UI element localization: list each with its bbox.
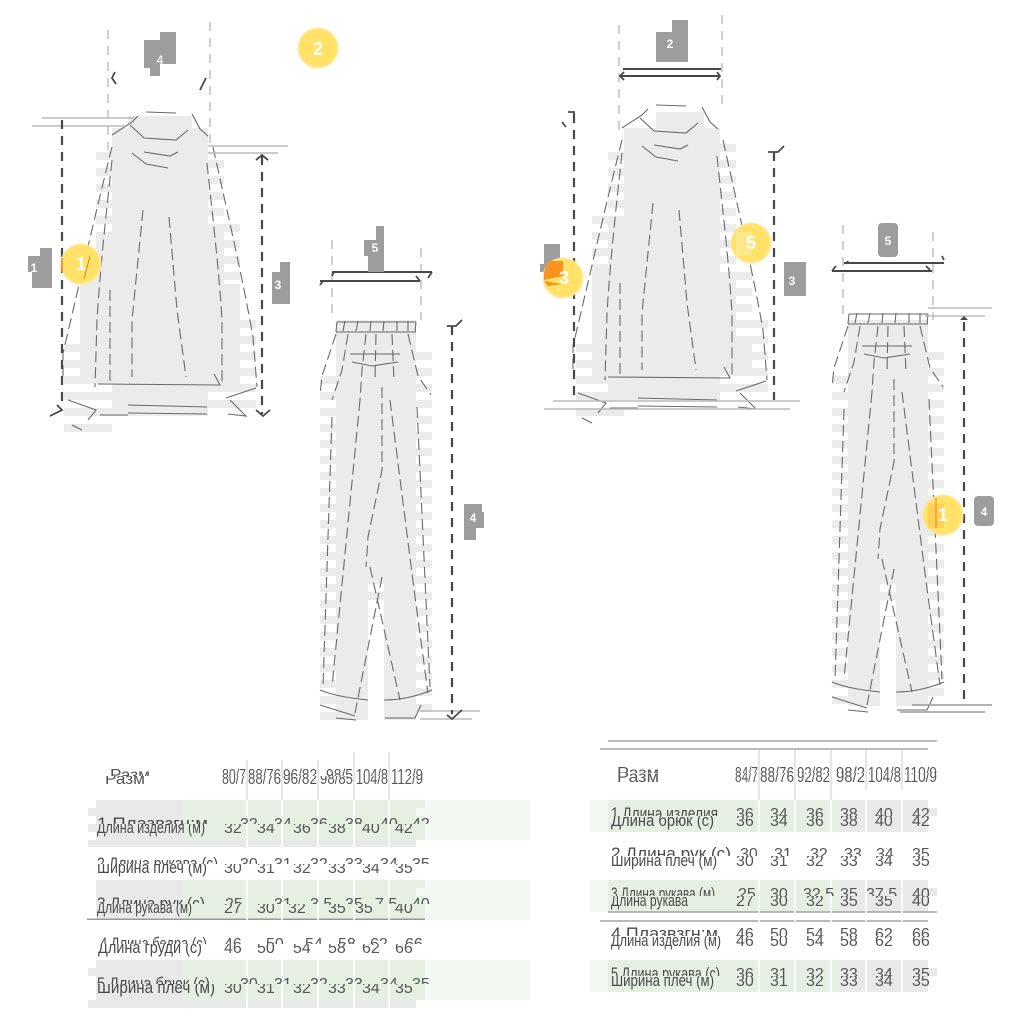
table text bottom slices: 98/85: [320, 771, 353, 788]
table text top slices: 33: [345, 856, 363, 873]
dimension arrow: length: [256, 155, 270, 416]
table text top slices: 1 Плазвзгн:м: [97, 814, 208, 833]
table text top slices: 31: [770, 966, 788, 983]
table text top slices: 30: [240, 856, 258, 873]
table text bottom slices: 110/9: [904, 769, 937, 786]
table bands: [590, 741, 937, 992]
table text bottom slices: 40: [912, 893, 930, 910]
table text top slices: 2 Длина рук (с): [611, 844, 731, 863]
table text top slices: 30: [770, 886, 788, 903]
table text top slices: 54: [806, 926, 824, 943]
table text top slices: 35: [912, 846, 930, 863]
table text bottom slices: 32: [806, 853, 824, 870]
table text bottom slices: 46: [736, 933, 754, 950]
table text top slices: 3 Длина рук (с): [97, 894, 205, 913]
table text bottom slices: 31: [770, 853, 788, 870]
table text top slices: 3,5: [310, 896, 332, 913]
table text top slices: 31: [274, 976, 292, 993]
table text top slices: 42: [412, 816, 430, 833]
table text bottom slices: 34: [770, 813, 788, 830]
table text top slices: 35: [412, 856, 430, 873]
table text top slices: 33: [840, 966, 858, 983]
table text bottom slices: Длина изделия (м): [97, 818, 205, 837]
table text bottom slices: 27: [736, 893, 754, 910]
table text top slices: 32: [240, 816, 258, 833]
table text top slices: 104/8: [356, 767, 388, 784]
table text bottom slices: 36: [806, 813, 824, 830]
table text top slices: Разм: [110, 767, 150, 784]
table text bottom slices: 32: [224, 820, 242, 837]
icon: grey badge 2: [656, 20, 688, 62]
table text top slices: 35: [345, 896, 363, 913]
table text bottom slices: 35: [355, 900, 373, 917]
icon: yellow badge 3 with orange overlap: [542, 257, 584, 299]
table bands: [87, 752, 530, 1008]
table text bottom slices: 30: [736, 853, 754, 870]
icon: yellow badge 3 with orange overlap: 3: [559, 268, 569, 288]
table text top slices: 1 Длина изделия: [611, 804, 718, 823]
table text top slices: 32: [310, 856, 328, 873]
panel: left trousers measure lines: [320, 240, 480, 719]
table text bottom slices: 32: [806, 973, 824, 990]
icon: grey badge 3: [784, 262, 806, 296]
table text bottom slices: 58: [840, 933, 858, 950]
icon: grey badge 5 right: 5: [885, 234, 892, 248]
table text top slices: 31: [774, 846, 792, 863]
icon: grey badge 5: 5: [372, 241, 379, 255]
table text top slices: 40: [912, 886, 930, 903]
table text top slices: 5 Длина брюк (с): [97, 974, 210, 993]
table text bottom slices: [97, 771, 423, 997]
dimension arrow: trousers length: [960, 316, 968, 703]
table text bottom slices: Длина груди (с): [98, 938, 202, 957]
table text top slices: [611, 765, 937, 983]
table text top slices: 4 Длина бедра (с): [100, 934, 207, 953]
table text top slices: 40: [380, 816, 398, 833]
table text bottom slices: 66: [395, 940, 413, 957]
table text top slices: 25: [225, 896, 243, 913]
table text top slices: 3 Длина рукава (м): [611, 884, 715, 903]
table text bottom slices: 62: [875, 933, 893, 950]
table text bottom slices: 32: [288, 900, 306, 917]
icon: yellow badge 5: [730, 222, 772, 264]
table text bottom slices: 40: [875, 813, 893, 830]
table text bottom slices: 104/8: [356, 771, 388, 788]
table text top slices: 54: [305, 936, 323, 953]
sweatshirt fill: [576, 112, 768, 416]
panel: left size table: [87, 752, 530, 1008]
icon: grey badge 1: [540, 244, 560, 272]
table text bottom slices: Ширина плеч (м): [611, 851, 717, 870]
table text top slices: 34: [876, 846, 894, 863]
table text bottom slices: Длина брюк (с): [611, 811, 714, 830]
table text top slices: 32,5: [803, 886, 834, 903]
table text bottom slices: 40: [362, 820, 380, 837]
panel: left trousers diagram: [320, 320, 432, 720]
table text top slices: 46: [736, 926, 754, 943]
table text top slices: 2 Длина рукава (с): [97, 854, 218, 873]
table text bottom slices: 30: [736, 973, 754, 990]
panel: left sweatshirt diagram: [63, 112, 257, 432]
table text bottom slices: 30: [770, 893, 788, 910]
table text top slices: 46: [224, 936, 242, 953]
table text bottom slices: 34: [875, 853, 893, 870]
icon: grey badge 3: 3: [275, 278, 282, 292]
icon: grey badge 4 trousers: 4: [470, 511, 477, 525]
table text top slices: 110/9: [904, 765, 937, 782]
icon: yellow badge 1 right: [922, 494, 964, 536]
table text bottom slices: Длина рукава: [611, 891, 688, 910]
table text bottom slices: Длина изделия (м): [611, 931, 721, 950]
table text bottom slices: 84/7: [735, 769, 758, 786]
table text bottom slices: 88/76: [760, 769, 794, 786]
panel: right size table: [590, 741, 937, 992]
table text bottom slices: 66: [912, 933, 930, 950]
trousers outlines: [320, 321, 432, 720]
table text bottom slices: 31: [257, 860, 275, 877]
icon: grey badge 4: [144, 32, 176, 76]
icon: yellow badge 1 right: 1: [938, 505, 948, 525]
icon: grey badge 4 right: 4: [981, 505, 988, 519]
table text top slices: 98/2: [836, 765, 865, 782]
table text bottom slices: 32: [293, 980, 311, 997]
table text bottom slices: 31: [770, 973, 788, 990]
table text bottom slices: 32: [806, 893, 824, 910]
table text bottom slices: 33: [840, 853, 858, 870]
table text top slices: 31: [274, 896, 292, 913]
table text bottom slices: Ширина плеч (м): [97, 978, 215, 997]
table text bottom slices: Ширина плеч (м): [97, 858, 207, 877]
table text bottom slices: 34: [362, 980, 380, 997]
table text bottom slices: 50: [257, 940, 275, 957]
icon: yellow badge 1: 1: [76, 254, 86, 274]
table text top slices: 31: [274, 856, 292, 873]
icon: yellow badge 2: [297, 27, 339, 69]
table text bottom slices: 54: [293, 940, 311, 957]
table text top slices: 66: [912, 926, 930, 943]
panel: right sweatshirt measure lines: [544, 15, 800, 409]
table text bottom slices: 33: [328, 980, 346, 997]
sweatshirt fill: [64, 116, 256, 432]
table text top slices: 36: [310, 816, 328, 833]
table text top slices: 88/76: [760, 765, 794, 782]
table text top slices: 50: [770, 926, 788, 943]
table text bottom slices: 32: [293, 860, 311, 877]
table text top slices: 96/82: [283, 767, 317, 784]
table text bottom slices: [611, 769, 937, 990]
sweatshirt outlines: [63, 112, 257, 430]
table text bottom slices: 112/9: [391, 771, 423, 788]
icon: yellow badge 5: 5: [746, 233, 756, 253]
icon: grey badge 4: 4: [157, 53, 164, 67]
table text top slices: 25: [738, 886, 756, 903]
table text top slices: 88/76: [248, 767, 281, 784]
icon: grey badge 2: 2: [667, 37, 674, 51]
panel: left sweatshirt measure lines: [32, 22, 288, 416]
icon: grey badge 5: [364, 226, 384, 272]
trousers outlines: [832, 313, 944, 712]
table text bottom slices: 104/8: [868, 769, 901, 786]
table text top slices: 66: [405, 936, 423, 953]
table text bottom slices: 34: [257, 820, 275, 837]
panel: right trousers diagram: [832, 313, 944, 712]
panel: right sweatshirt diagram: [573, 105, 768, 423]
table text top slices: 58: [338, 936, 356, 953]
table text bottom slices: 33: [328, 860, 346, 877]
table text bottom slices: 58: [328, 940, 346, 957]
icon: grey badge 4 right: [974, 496, 994, 526]
table text top slices: Разм: [617, 765, 659, 782]
table text top slices: 62: [875, 926, 893, 943]
table text top slices: 7,5: [375, 896, 397, 913]
table text top slices: 50: [266, 936, 284, 953]
table text bottom slices: 42: [912, 813, 930, 830]
table text bottom slices: 98/2: [836, 769, 865, 786]
table text bottom slices: 40: [395, 900, 413, 917]
table text top slices: 4 Плазвзгн:м: [611, 924, 718, 943]
table text top slices: 38: [345, 816, 363, 833]
table text bottom slices: Разм: [105, 771, 145, 788]
table text bottom slices: 33: [840, 973, 858, 990]
table text top slices: 38: [840, 806, 858, 823]
table text top slices: 112/9: [391, 767, 423, 784]
table text top slices: 32: [810, 846, 828, 863]
table text bottom slices: 27: [224, 900, 242, 917]
table text bottom slices: 31: [257, 980, 275, 997]
table text top slices: 62: [370, 936, 388, 953]
table text bottom slices: 35: [395, 980, 413, 997]
table text top slices: 36: [736, 806, 754, 823]
table text bottom slices: 36: [736, 813, 754, 830]
table text top slices: 33: [844, 846, 862, 863]
table text top slices: 104/8: [868, 765, 901, 782]
table text top slices: 30: [240, 976, 258, 993]
table text top slices: [97, 767, 430, 993]
table text bottom slices: 80/7: [222, 771, 246, 788]
table text bottom slices: Длина рукава (м): [97, 898, 192, 917]
table text bottom slices: 35: [840, 893, 858, 910]
dimension arrow: length: [768, 146, 784, 400]
table text bottom slices: 54: [806, 933, 824, 950]
table text top slices: 80/7: [222, 767, 246, 784]
table text top slices: 34: [875, 966, 893, 983]
panel: right trousers measure lines: [832, 225, 992, 712]
icon: grey badge 1: [28, 248, 52, 288]
table text bottom slices: 30: [224, 860, 242, 877]
table text bottom slices: 36: [293, 820, 311, 837]
table text top slices: 40: [875, 806, 893, 823]
table text top slices: 92/82: [797, 765, 830, 782]
table text top slices: 37,5: [866, 886, 897, 903]
table text top slices: 34: [380, 856, 398, 873]
table text top slices: 35: [412, 976, 430, 993]
table text bottom slices: Разм: [617, 769, 659, 786]
table text top slices: 84/7: [735, 765, 758, 782]
table text top slices: 5 Длина рукава (с): [611, 964, 720, 983]
table text bottom slices: 35: [328, 900, 346, 917]
table text bottom slices: 96/82: [283, 771, 317, 788]
icon: grey badge 3: [272, 262, 290, 304]
table text top slices: 36: [736, 966, 754, 983]
table text top slices: 98/5: [326, 767, 353, 784]
sweatshirt outlines: [573, 105, 767, 423]
table text bottom slices: 46: [224, 940, 242, 957]
table text bottom slices: 35: [395, 860, 413, 877]
trousers fill: [832, 320, 944, 706]
icon: grey badge 3: 3: [789, 274, 796, 288]
icon: yellow badge 1: [60, 243, 102, 285]
table text top slices: 35: [840, 886, 858, 903]
icon: grey badge 5 right: [878, 223, 898, 257]
table text top slices: 36: [806, 806, 824, 823]
table text top slices: 30: [740, 846, 758, 863]
table text top slices: 32: [806, 966, 824, 983]
table text bottom slices: 35: [912, 853, 930, 870]
table text bottom slices: 30: [257, 900, 275, 917]
table text top slices: 40: [412, 896, 430, 913]
table text top slices: 35: [912, 966, 930, 983]
table text bottom slices: 88/76: [248, 771, 281, 788]
icon: grey badge 4 trousers: [464, 504, 484, 540]
icon: yellow badge 2: 2: [313, 39, 323, 59]
table text top slices: 42: [912, 806, 930, 823]
table text top slices: 33: [345, 976, 363, 993]
table text bottom slices: 50: [770, 933, 788, 950]
table text top slices: 34: [770, 806, 788, 823]
icon: grey badge 1: 1: [31, 261, 38, 275]
table text bottom slices: 38: [840, 813, 858, 830]
table text top slices: 32: [310, 976, 328, 993]
table text bottom slices: 34: [875, 973, 893, 990]
dimension arrow: trousers length: [447, 320, 462, 719]
table text bottom slices: Ширина плеч (м): [611, 971, 714, 990]
table text bottom slices: 35: [875, 893, 893, 910]
table text bottom slices: 38: [328, 820, 346, 837]
table text bottom slices: 30: [224, 980, 242, 997]
dimension arrow: sleeve: [50, 120, 62, 416]
table text bottom slices: 42: [395, 820, 413, 837]
table text bottom slices: 35: [912, 973, 930, 990]
trousers fill: [320, 320, 432, 720]
table text top slices: 34: [380, 976, 398, 993]
table text bottom slices: 62: [362, 940, 380, 957]
dimension arrow: sleeve: [562, 112, 574, 400]
table text top slices: 58: [840, 926, 858, 943]
table text bottom slices: 92/82: [797, 769, 830, 786]
table text bottom slices: 34: [362, 860, 380, 877]
table text top slices: 34: [274, 816, 292, 833]
